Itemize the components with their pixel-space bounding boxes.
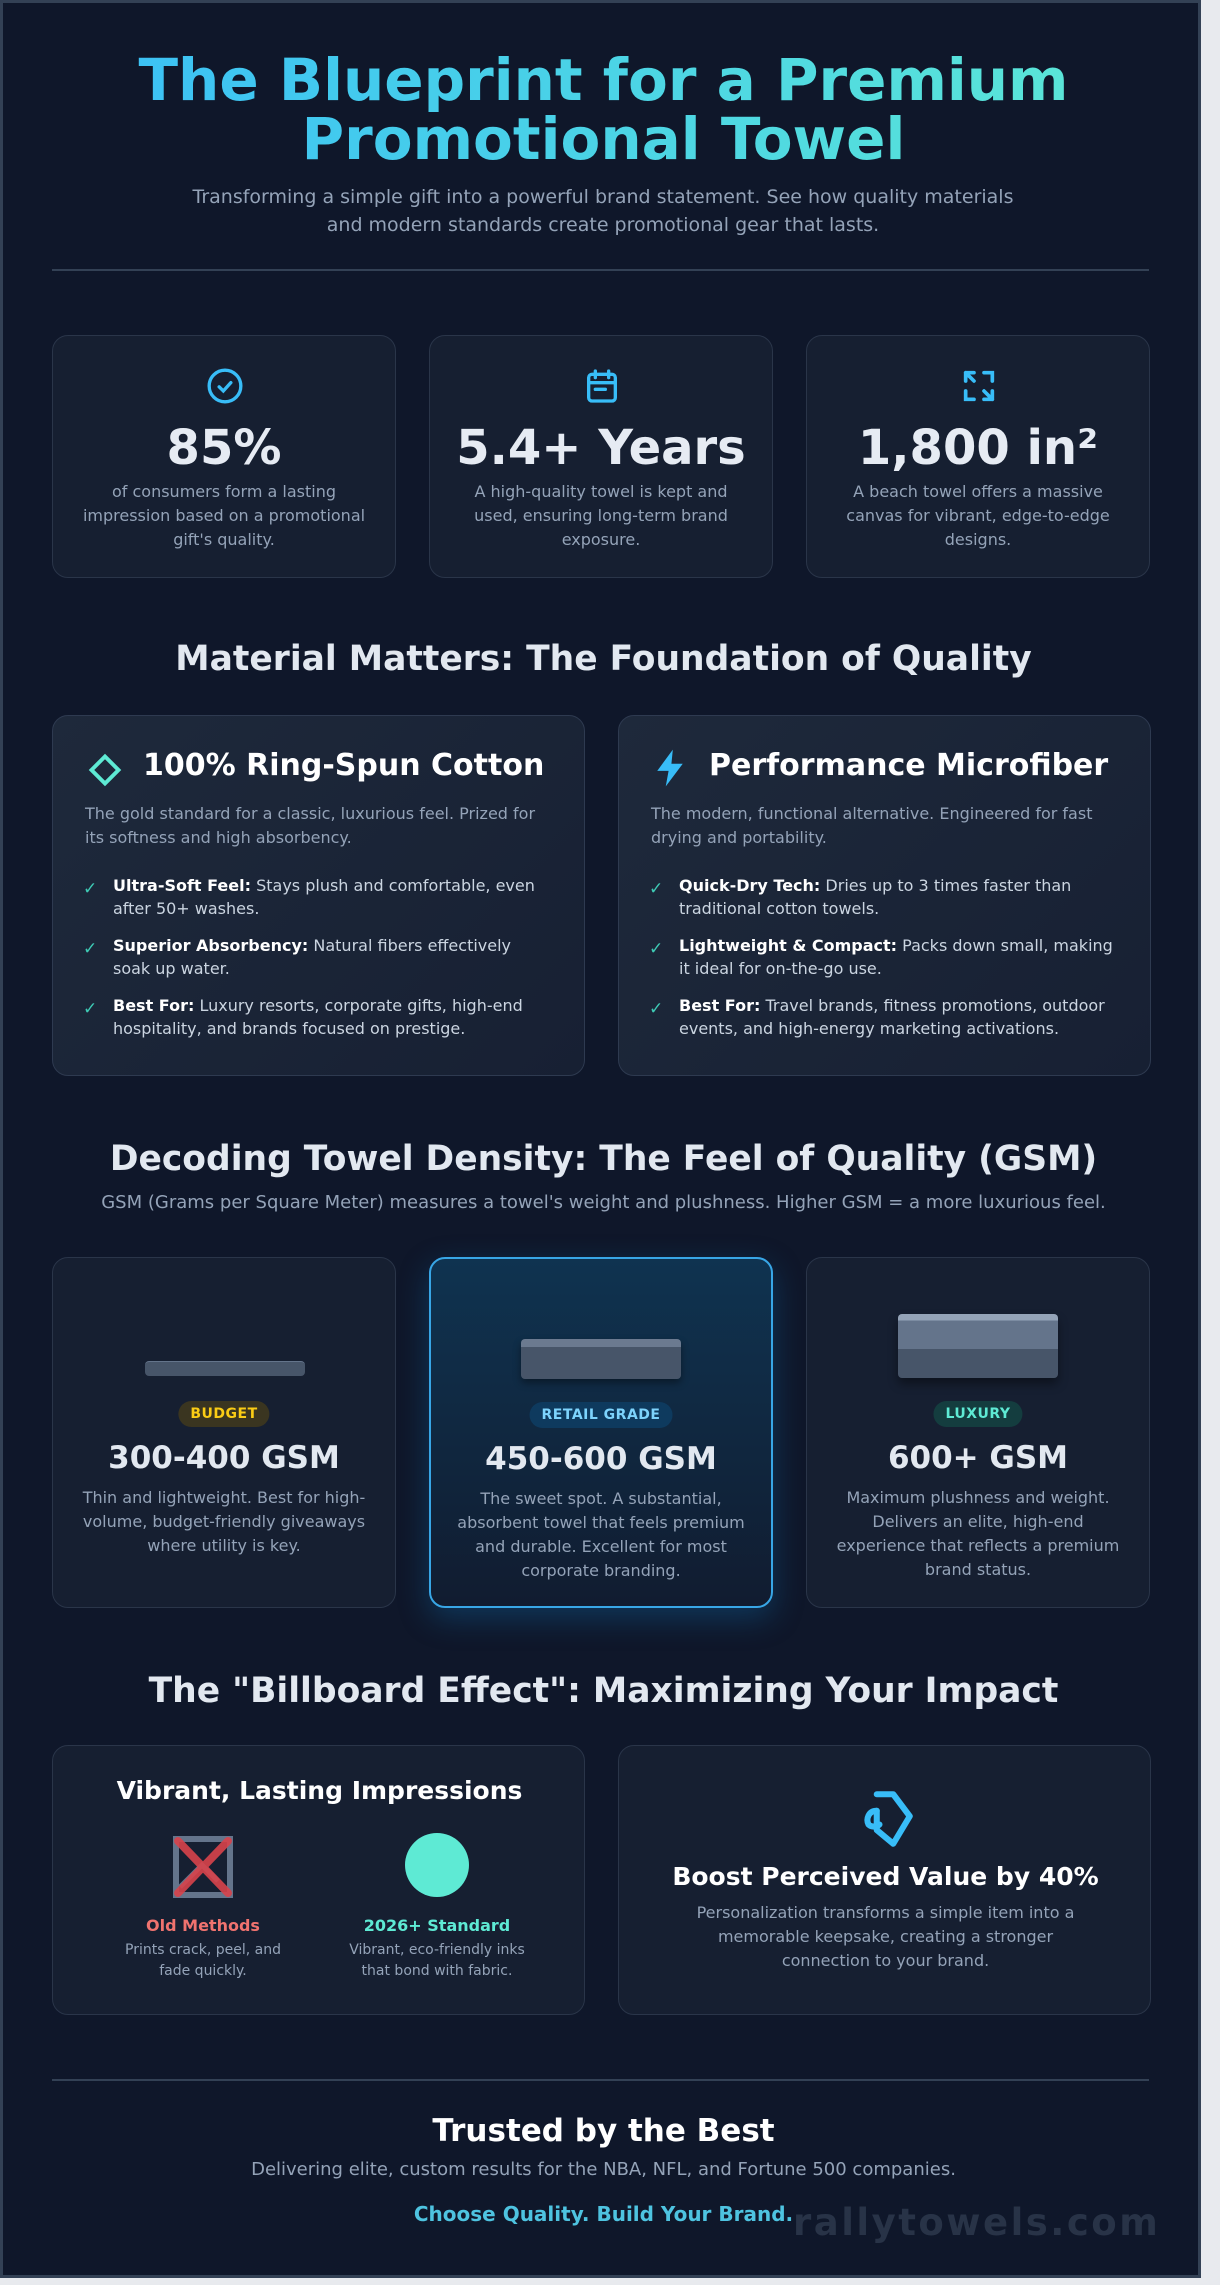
- bullet list: ✓: [83, 879, 97, 899]
- panel: cotton: [52, 715, 585, 1076]
- panel title: Boost Perceived Value by 40%: [672, 1862, 1099, 1891]
- bullet list: [83, 876, 535, 1038]
- badge: budget: BUDGET: [190, 1406, 258, 1422]
- icon: calendar: [587, 369, 617, 403]
- bullet list: Ultra-Soft Feel: Stays plush and comfortable, even after 50+ washes.: [113, 876, 535, 918]
- badge: retail: RETAIL GRADE: [542, 1407, 660, 1423]
- badge: retail: [530, 1402, 672, 1428]
- heading: gsm: Decoding Towel Density: The Feel of Quality (GSM): [110, 1139, 1097, 1179]
- icon: check circle: [208, 368, 242, 404]
- icon: crossed image: [173, 1836, 233, 1898]
- footer tagline: Choose Quality. Build Your Brand.: [414, 2202, 793, 2226]
- subtitle: and modern standards create promotional gear that lasts.: [327, 214, 879, 236]
- bullet list: Superior Absorbency: Natural fibers effectively soak up water.: [113, 936, 511, 978]
- old methods text: Prints crack, peel, and fade quickly.: [125, 1942, 281, 1979]
- stat number: 5.4+ Years: [456, 420, 746, 476]
- footer text: Delivering elite, custom results for the NBA, NFL, and Fortune 500 companies.: [251, 2159, 956, 2180]
- footer heading: Trusted by the Best: [432, 2113, 775, 2149]
- title: The Blueprint for a Premium: [138, 46, 1068, 114]
- panel title: Vibrant, Lasting Impressions: [117, 1776, 522, 1805]
- gsm description: Maximum plushness and weight. Delivers an elite, high-end experience that reflects a premium brand status.: [837, 1488, 1119, 1579]
- panel: perceived value: [618, 1745, 1151, 2015]
- towel graphic thin: [145, 1361, 305, 1376]
- bullet list: ✓: [649, 999, 663, 1019]
- card title: Performance Microfiber: [709, 748, 1108, 783]
- badge: budget: [178, 1401, 270, 1427]
- badge: luxury: [933, 1401, 1023, 1427]
- panel: vibrant impressions: [52, 1745, 585, 2015]
- standard label: 2026+ Standard: [364, 1916, 510, 1935]
- heading: material matters: Material Matters: The Foundation of Quality: [175, 639, 1032, 679]
- bullet list: Best For: Travel brands, fitness promotions, outdoor events, and high-energy marketing activations.: [679, 996, 1105, 1038]
- subtitle: Transforming a simple gift into a powerful brand statement. See how quality materials: [193, 186, 1013, 208]
- stat text: A high-quality towel is kept and used, ensuring long-term brand exposure.: [474, 482, 728, 549]
- gsm description: The sweet spot. A substantial, absorbent towel that feels premium and durable. Excellent for most corporate branding.: [457, 1489, 745, 1580]
- heading: billboard: The "Billboard Effect": Maximizing Your Impact: [149, 1671, 1058, 1711]
- bullet list: ✓: [649, 879, 663, 899]
- bullet list: Lightweight & Compact: Packs down small, making it ideal for on-the-go use.: [679, 936, 1113, 978]
- bullet list: [649, 876, 1113, 1038]
- panel text: Personalization transforms a simple item into a memorable keepsake, creating a stronger connection to your brand.: [697, 1903, 1074, 1970]
- towel graphic medium: [521, 1339, 681, 1379]
- icon: bolt: [657, 750, 683, 786]
- panel: retail (highlighted): [429, 1257, 773, 1608]
- subtitle: [192, 186, 1013, 236]
- card description: The gold standard for a classic, luxurious feel. Prized for its softness and high absorbency.: [85, 804, 535, 847]
- standard text: Vibrant, eco-friendly inks that bond with fabric.: [349, 1942, 525, 1979]
- gsm value: 600+ GSM: [888, 1440, 1068, 1476]
- gsm description: Thin and lightweight. Best for high-volume, budget-friendly giveaways where utility is key.: [83, 1488, 365, 1555]
- gsm subtitle: GSM (Grams per Square Meter) measures a towel's weight and plushness. Higher GSM = a more luxurious feel.: [101, 1192, 1106, 1213]
- card description: The modern, functional alternative. Engineered for fast drying and portability.: [651, 804, 1092, 847]
- bullet list: Quick-Dry Tech: Dries up to 3 times faster than traditional cotton towels.: [679, 876, 1071, 918]
- stat number: 1,800 in²: [858, 420, 1098, 476]
- panel: luxury: [806, 1257, 1150, 1608]
- gsm value: 300-400 GSM: [108, 1440, 340, 1476]
- icon: tag: [864, 1791, 913, 1847]
- stat text: of consumers form a lasting impression based on a promotional gift's quality.: [83, 482, 365, 549]
- title: [3, 51, 1204, 169]
- panel: budget: [52, 1257, 396, 1608]
- stat number: 85%: [167, 420, 281, 476]
- bullet list: ✓: [83, 999, 97, 1019]
- bullet list: ✓: [649, 939, 663, 959]
- gsm value: 450-600 GSM: [485, 1441, 717, 1477]
- towel graphic thick: [898, 1314, 1058, 1378]
- stat card: years: [429, 335, 773, 578]
- stat text: A beach towel offers a massive canvas for vibrant, edge-to-edge designs.: [846, 482, 1110, 549]
- bullet list: Best For: Luxury resorts, corporate gifts, high-end hospitality, and brands focused on prestige.: [113, 996, 523, 1038]
- icon: expand arrows: [964, 370, 994, 402]
- stat card: area: [806, 335, 1150, 578]
- panel: microfiber: [618, 715, 1151, 1076]
- icon: diamond: [88, 754, 122, 786]
- title: Promotional Towel: [302, 105, 905, 173]
- watermark: rallytowels.com: [793, 2201, 1160, 2244]
- old methods label: Old Methods: [146, 1916, 260, 1935]
- stat card: 85%: [52, 335, 396, 578]
- bullet list: ✓: [83, 939, 97, 959]
- card title: 100% Ring-Spun Cotton: [143, 748, 544, 783]
- icon: teal circle: [405, 1833, 469, 1897]
- badge: luxury: LUXURY: [945, 1406, 1011, 1422]
